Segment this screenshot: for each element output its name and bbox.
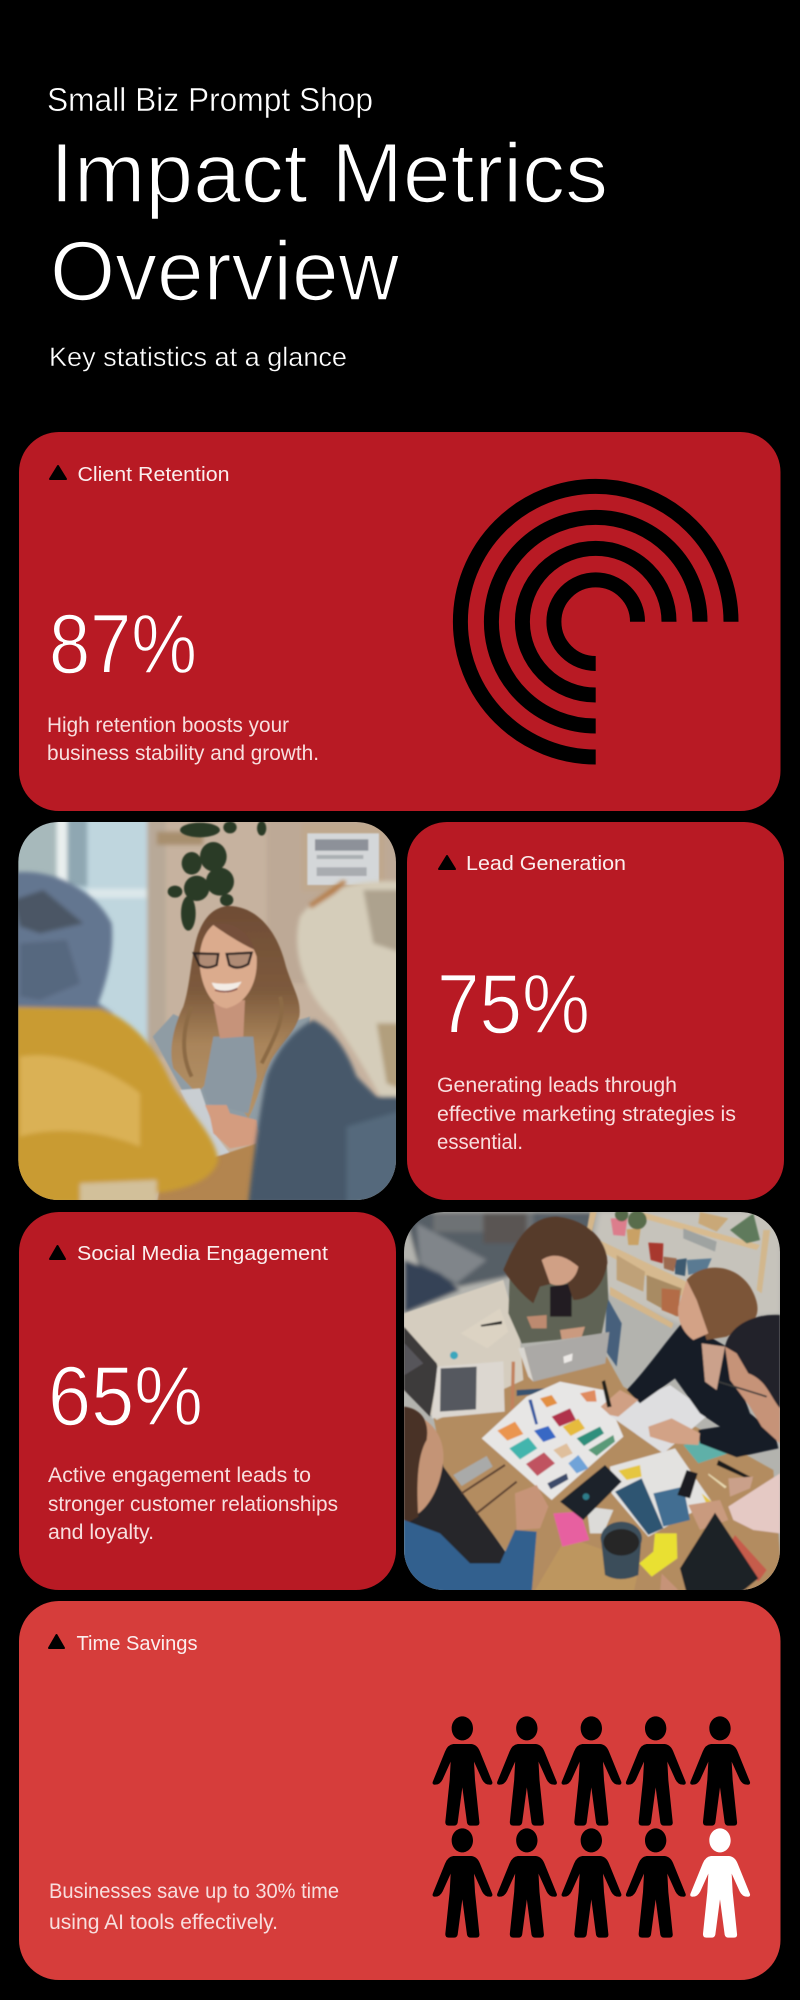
hair <box>171 906 300 1118</box>
woman top: hair and face <box>503 1217 607 1303</box>
icon: triangle <box>50 466 66 479</box>
description <box>437 1074 736 1154</box>
left person hood <box>10 872 113 1017</box>
upper table whitish <box>404 1280 523 1420</box>
statistic: 75% <box>437 957 590 1051</box>
subtitle: Key statistics at a glance <box>49 342 347 372</box>
notebook <box>461 1308 508 1348</box>
title: Impact Metrics <box>50 126 608 220</box>
man bottom left <box>404 1413 443 1520</box>
man right <box>725 1315 780 1443</box>
face <box>199 924 257 1008</box>
label: Lead Generation <box>466 853 626 875</box>
icon: triangle <box>49 1635 64 1648</box>
table wood <box>433 1356 780 1590</box>
header <box>47 81 608 372</box>
laptop <box>180 1088 230 1157</box>
brand name: Small Biz Prompt Shop <box>47 81 373 118</box>
panel: client retention <box>19 432 780 811</box>
poster <box>307 833 379 885</box>
room and window <box>400 1207 787 1593</box>
pots and cups <box>611 1218 627 1236</box>
blue tack <box>450 1351 458 1359</box>
description <box>47 714 319 765</box>
papers under hand <box>607 1385 710 1453</box>
shelves <box>600 1241 686 1296</box>
label: Social Media Engagement <box>77 1243 328 1265</box>
description: High retention boosts your <box>47 714 289 737</box>
description: effective marketing strategies is <box>437 1103 736 1126</box>
panel: social media engagement <box>19 1212 396 1590</box>
hands <box>205 1105 260 1148</box>
right person hair <box>297 881 403 1097</box>
photo: smiling woman in a meeting <box>10 817 403 1203</box>
notes <box>553 1512 589 1547</box>
mug <box>600 1542 642 1580</box>
plant <box>168 821 266 931</box>
statistic: 87% <box>49 597 197 691</box>
title <box>50 126 608 318</box>
icon: triangle <box>439 856 455 869</box>
panel: lead generation <box>407 822 784 1200</box>
table <box>157 1143 257 1203</box>
laptop left <box>404 1327 438 1417</box>
paper sheet main <box>482 1382 623 1500</box>
woman top: chair and jacket <box>605 1297 622 1367</box>
sweater front <box>203 1037 257 1113</box>
mouth <box>212 982 242 993</box>
chart: people pictogram, 9 of 10 black <box>433 1716 750 1938</box>
pens <box>511 1362 515 1409</box>
man glasses and silver pen <box>453 1456 493 1486</box>
panel: time savings <box>19 1601 780 1980</box>
title: Overview <box>50 224 399 318</box>
description: Businesses save up to 30% time <box>49 1880 339 1903</box>
man right shirt and hands <box>728 1473 780 1533</box>
description: Active engagement leads to <box>48 1464 311 1487</box>
description: stronger customer relationships <box>48 1493 338 1516</box>
icon: triangle <box>50 1246 65 1259</box>
sweater shoulders <box>153 1014 310 1130</box>
statistic: 65% <box>48 1349 203 1443</box>
description <box>48 1464 338 1544</box>
laptop center <box>524 1332 609 1382</box>
woman right: jacket <box>627 1322 778 1457</box>
photo: team collaborating around a table <box>400 1207 787 1593</box>
tablet <box>728 1535 767 1582</box>
phone <box>560 1465 622 1520</box>
woman right: hair and face <box>687 1268 757 1340</box>
under-table shadow <box>404 1420 513 1593</box>
right person blazer <box>248 1020 403 1203</box>
hands <box>527 1315 547 1328</box>
label: Time Savings <box>76 1633 198 1655</box>
hands <box>601 1390 638 1417</box>
glasses <box>194 953 252 968</box>
description: using AI tools effectively. <box>49 1911 278 1934</box>
label: Client Retention <box>78 464 230 486</box>
chart: concentric arcs <box>460 486 731 757</box>
photo sheet <box>610 1448 712 1537</box>
description: business stability and growth. <box>47 742 319 765</box>
neck <box>213 1000 245 1038</box>
description <box>49 1880 339 1934</box>
chest <box>702 1343 725 1390</box>
description: Generating leads through <box>437 1074 677 1097</box>
left person coat <box>10 1007 218 1203</box>
description: essential. <box>437 1131 523 1154</box>
description: and loyalty. <box>48 1521 154 1544</box>
